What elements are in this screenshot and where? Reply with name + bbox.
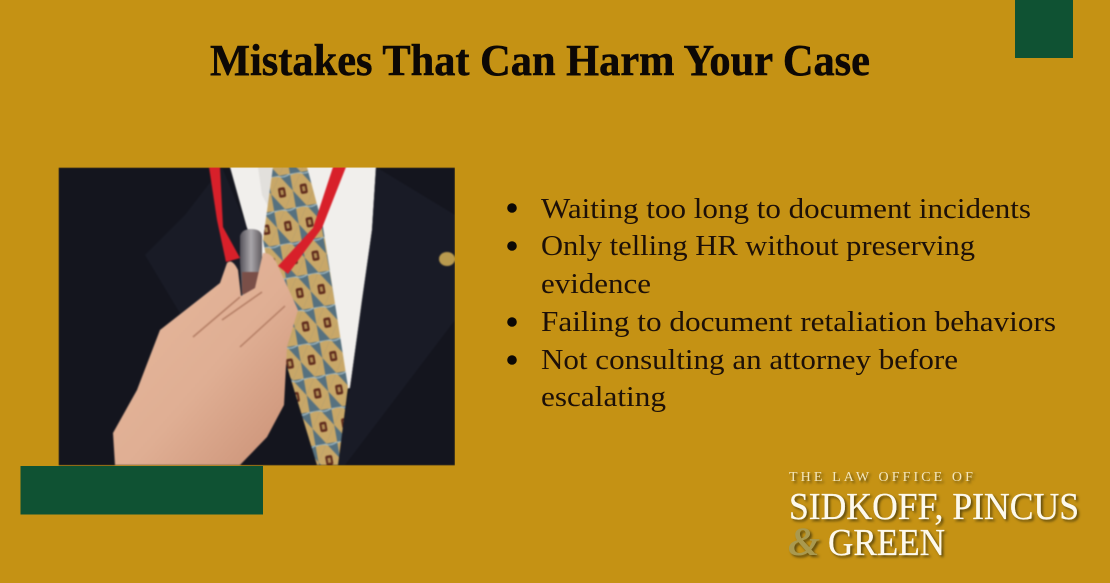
bullet 4 xyxy=(507,344,958,413)
lapel left xyxy=(247,228,248,229)
jacket xyxy=(58,168,455,466)
shirt xyxy=(230,167,376,400)
shirt collar shadow xyxy=(258,168,273,204)
decorative green bar, bottom left xyxy=(20,466,263,514)
bullet 4: Not consulting an attorney before xyxy=(541,344,958,376)
bullet 4: escalating xyxy=(541,381,666,413)
logo: The Law Office of Sidkoff, Pincus & Green: GREEN xyxy=(828,522,945,564)
logo: The Law Office of Sidkoff, Pincus & Green: SIDKOFF, PINCUS xyxy=(789,486,1079,528)
logo: The Law Office of Sidkoff, Pincus & Green: & xyxy=(788,519,820,564)
logo: The Law Office of Sidkoff, Pincus & Green xyxy=(788,469,1079,564)
title: Mistakes That Can Harm Your Case xyxy=(210,36,870,85)
bullet 2: Only telling HR without preserving xyxy=(541,230,975,262)
bullet 2: evidence xyxy=(541,268,651,300)
bullet list xyxy=(507,193,1056,413)
hand xyxy=(113,253,298,465)
lapel pin xyxy=(439,252,455,266)
lapel right xyxy=(350,168,376,386)
photo: hand holding a whistle xyxy=(58,167,455,466)
bullet 2 xyxy=(507,230,975,300)
logo: The Law Office of Sidkoff, Pincus & Green: THE LAW OFFICE OF xyxy=(789,469,976,484)
decorative green square, top right xyxy=(1015,0,1073,58)
tie xyxy=(263,167,348,465)
lanyard right xyxy=(278,167,346,274)
bullet 3: Failing to document retaliation behaviors xyxy=(541,306,1056,338)
lanyard left xyxy=(209,167,240,262)
whistle xyxy=(240,229,262,296)
finger creases xyxy=(193,292,285,347)
bullet 1: Waiting too long to document incidents xyxy=(541,193,1031,225)
